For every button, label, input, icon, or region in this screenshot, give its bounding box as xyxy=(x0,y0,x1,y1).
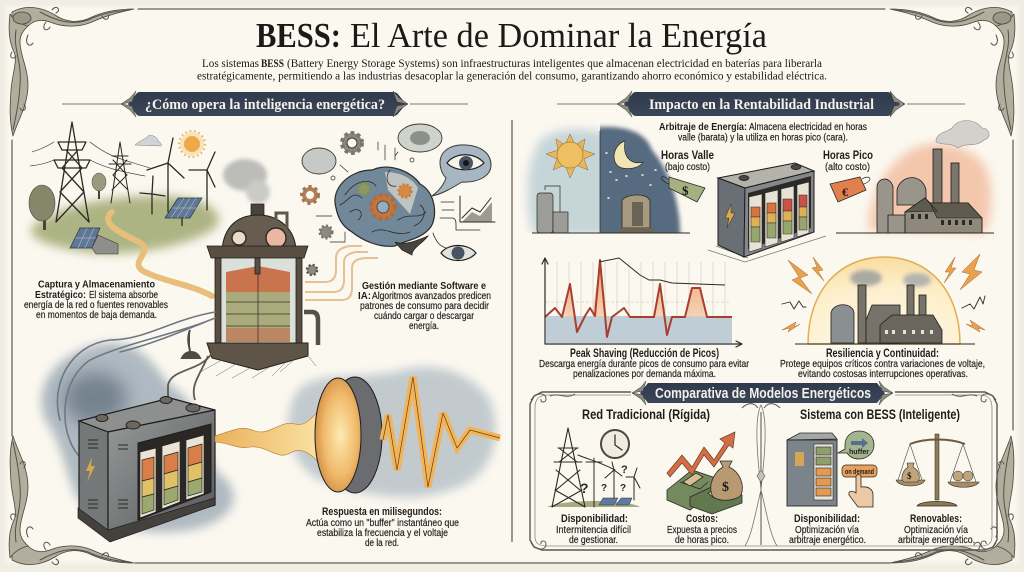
solar panels xyxy=(70,198,202,254)
intro text: Los sistemas xyxy=(202,58,259,70)
text: Captura y Almacenamiento: en momentos de baja demanda. xyxy=(36,310,157,321)
smoke xyxy=(936,120,989,148)
on demand button: on demand xyxy=(845,467,874,476)
ground xyxy=(547,501,640,507)
orange price tag xyxy=(830,177,870,202)
illustration: energy flame to flywheel and waveform xyxy=(215,367,500,497)
outer gears xyxy=(302,133,362,238)
tanks xyxy=(877,178,926,233)
dark wash xyxy=(63,372,127,424)
text: Captura y Almacenamiento: Captura y Almacenamiento xyxy=(38,278,155,290)
icon: traditional grid xyxy=(547,428,640,507)
text: Captura y Almacenamiento: energía de la red o fuentes renovables xyxy=(24,300,168,311)
factory xyxy=(831,285,942,343)
banner: Cómo opera xyxy=(62,91,468,117)
reference line xyxy=(546,301,730,303)
hatch shadow xyxy=(708,236,826,262)
side pipe xyxy=(276,213,287,228)
text: Peak Shaving: penalizaciones por demanda máxima. xyxy=(573,369,716,380)
grid xyxy=(557,262,725,344)
text: Disponibilidad BESS: Disponibilidad: xyxy=(794,513,860,525)
terminals xyxy=(739,164,801,181)
text: Gestión mediante Software e IA: energía. xyxy=(409,321,439,332)
text: Resiliencia y Continuidad: evitando costosas interrupciones operativas. xyxy=(798,369,968,380)
red demand line xyxy=(545,260,732,337)
hill wash xyxy=(31,196,219,254)
hand xyxy=(849,475,873,507)
illustration: valley hours day and night xyxy=(528,127,705,240)
money bag: $ xyxy=(722,480,729,495)
chart: peak shaving xyxy=(542,258,742,347)
text: Arbitraje de Energía xyxy=(659,121,867,144)
vents xyxy=(88,440,128,508)
wash xyxy=(288,367,496,497)
circuit lines xyxy=(316,142,398,242)
banner: Impacto: Impacto en la Rentabilidad Industrial xyxy=(649,97,874,113)
smoke xyxy=(850,270,931,287)
text: Disponibilidad red: de gestionar. xyxy=(569,535,618,546)
voltage squiggles xyxy=(782,296,985,309)
text: Gestión mediante Software e IA: Gestión mediante Software e xyxy=(362,280,486,292)
panel: comparativa frame xyxy=(530,392,997,550)
data wires to brain xyxy=(305,246,378,300)
top xyxy=(718,163,814,188)
text: Arbitraje de Energía: Arbitraje de Energía: xyxy=(659,121,747,133)
server body xyxy=(787,440,837,506)
speech bubble eye xyxy=(432,145,491,196)
night machine xyxy=(619,195,654,233)
dome xyxy=(222,215,296,250)
text: Renovables: arbitraje energético. xyxy=(898,535,975,546)
intro text: estratégicamente, permitiendo a las industrias desacoplar la generación del consumo, garantizando ahorro económico y estabilidad eléctrica. xyxy=(197,70,827,82)
text: Resiliencia y Continuidad: Protege equipos críticos contra variaciones de voltaje, xyxy=(780,359,985,370)
brain folds xyxy=(340,170,426,234)
thought clouds xyxy=(302,124,442,180)
text: Renovables xyxy=(898,513,975,546)
bolt xyxy=(725,204,735,228)
text: Disponibilidad BESS: Optimización vía xyxy=(795,525,860,536)
right pan with coins xyxy=(948,444,979,487)
text: Captura y Almacenamiento: El sistema absorbe xyxy=(89,290,158,301)
illustration: battery reactor xyxy=(200,159,378,378)
corner ornament: top left xyxy=(9,7,134,136)
text: Respuesta en milisegundos: de la red. xyxy=(365,538,399,549)
banner: Cómo opera: ¿Cómo opera la inteligencia energética? xyxy=(145,97,385,113)
text: Peak Shaving xyxy=(539,348,750,380)
text: Arbitraje de Energía: valle (barata) y la utiliza en horas pico (cara). xyxy=(678,132,848,144)
illustration: peak hours factory xyxy=(830,120,994,233)
orange wash xyxy=(868,143,991,233)
battery front xyxy=(108,410,215,537)
opening xyxy=(748,176,811,249)
text: Gestión mediante Software e IA: cuándo cargar o descargar xyxy=(374,311,475,322)
cells xyxy=(814,444,833,500)
growth chart xyxy=(440,196,495,230)
text: Costos: de horas pico. xyxy=(675,535,729,546)
stars xyxy=(606,153,656,198)
roof and windows xyxy=(905,198,982,218)
ground line xyxy=(836,232,994,234)
side xyxy=(718,178,745,257)
plug xyxy=(182,330,200,358)
left pan with bag: $ xyxy=(907,471,912,481)
outlet pipe xyxy=(304,312,318,345)
text: Horas Valle xyxy=(661,150,714,173)
text: Horas Pico: (alto costo) xyxy=(825,162,870,173)
icon: balance scale xyxy=(896,434,979,506)
illustration: grid and renewables landscape xyxy=(29,122,219,296)
heading: Red Tradicional: Red Tradicional (Rígida) xyxy=(582,407,710,422)
base xyxy=(207,343,308,370)
battery stack xyxy=(226,266,290,344)
day wash xyxy=(528,129,610,235)
buffer bubble: huffer xyxy=(849,447,869,456)
corner ornament: bottom right xyxy=(890,436,1015,565)
gauges xyxy=(232,228,286,248)
heading: Sistema con BESS: Sistema con BESS (Inteligente) xyxy=(800,407,960,422)
question marks: ? xyxy=(580,480,589,496)
axes xyxy=(542,258,742,347)
text: Renovables: Optimización vía xyxy=(904,525,969,536)
intro text: BESS xyxy=(261,58,284,70)
cells xyxy=(140,435,204,518)
text: Peak Shaving: Descarga energía durante picos de consumo para evitar xyxy=(539,359,750,370)
chimney xyxy=(251,204,264,218)
text: Captura y Almacenamiento xyxy=(24,278,168,321)
wash xyxy=(41,343,234,532)
cloud xyxy=(135,135,161,146)
text: Respuesta en milisegundos: Actúa como un "buffer" instantáneo que xyxy=(306,518,459,529)
title: El Arte de Dominar la Energía xyxy=(350,16,767,55)
large tower xyxy=(30,122,150,222)
brain gears xyxy=(358,183,412,219)
text: Gestión mediante Software e IA: patrones de consumo para decidir xyxy=(360,301,490,312)
rim xyxy=(328,377,382,493)
text: Horas Pico: Horas Pico xyxy=(823,150,873,162)
dome xyxy=(808,257,960,344)
battery side xyxy=(79,421,108,535)
corner ornament: bottom left xyxy=(9,436,134,565)
front xyxy=(744,171,814,257)
disc xyxy=(315,378,361,492)
ground xyxy=(795,343,975,345)
brain stem xyxy=(395,236,428,255)
beam xyxy=(910,440,965,444)
shaved line xyxy=(599,258,725,285)
battery top xyxy=(79,398,215,432)
base plate xyxy=(78,498,215,542)
cables xyxy=(168,353,212,400)
icon: rising costs xyxy=(667,432,742,514)
text: Gestión mediante Software e IA xyxy=(358,280,491,332)
bolts xyxy=(782,254,985,332)
cells xyxy=(749,182,809,252)
lid and pillars xyxy=(207,246,308,346)
brain highlights xyxy=(385,172,418,214)
banner: Comparativa xyxy=(632,381,893,405)
wind turbines xyxy=(140,138,215,214)
green price tag: $ xyxy=(682,183,689,198)
question marks: ? xyxy=(601,483,607,494)
tower xyxy=(552,428,585,507)
banner: Comparativa: Comparativa de Modelos Energéticos xyxy=(655,386,871,402)
illustration: resilience dome xyxy=(782,254,985,344)
question marks: ? xyxy=(620,483,626,494)
title: BESS: xyxy=(256,16,341,55)
ground line xyxy=(532,232,690,234)
night wash xyxy=(600,124,684,232)
post xyxy=(935,434,939,500)
small gear xyxy=(307,265,317,275)
question marks: ? xyxy=(621,464,628,476)
text: Resiliencia y Continuidad: Resiliencia y Continuidad: xyxy=(826,348,939,360)
intro text xyxy=(197,58,827,82)
base xyxy=(917,502,957,506)
blue consumption fill xyxy=(546,316,732,343)
text: Horas Pico xyxy=(823,150,873,173)
text: Disponibilidad red: Intermitencia difícil xyxy=(556,525,631,536)
pole and wires xyxy=(578,455,615,507)
illustration: central battery xyxy=(708,163,826,262)
text: Disponibilidad BESS: arbitraje energético. xyxy=(789,535,866,546)
text: Gestión mediante Software e IA: Algoritmos avanzados predicen xyxy=(372,291,491,302)
lightning mark xyxy=(86,457,95,482)
waveform xyxy=(383,377,500,487)
divider xyxy=(599,131,601,233)
energy path xyxy=(108,212,212,296)
clock xyxy=(601,430,629,458)
text: Costos xyxy=(667,513,737,546)
text: Gestión mediante Software e IA: IA: xyxy=(358,291,371,302)
text: Captura y Almacenamiento: Estratégico: xyxy=(35,289,86,301)
text: Disponibilidad BESS xyxy=(789,513,866,546)
banner: Impacto xyxy=(557,91,965,117)
building xyxy=(905,198,982,233)
text: Disponibilidad red xyxy=(556,513,631,546)
flame xyxy=(215,400,328,472)
panel divider xyxy=(511,120,513,542)
illustration: AI brain xyxy=(302,124,495,260)
swirling lines xyxy=(57,312,215,455)
moon xyxy=(614,141,643,169)
panels xyxy=(599,498,632,505)
trees xyxy=(29,173,106,230)
tanks xyxy=(537,186,568,233)
text: Respuesta en milisegundos: Respuesta en milisegundos: xyxy=(322,506,442,518)
glass body xyxy=(218,252,300,347)
factory windows xyxy=(885,330,933,334)
opening xyxy=(138,424,211,520)
brain body xyxy=(335,167,435,246)
label on server xyxy=(795,452,804,466)
stacks xyxy=(933,149,959,207)
lower eye xyxy=(433,233,476,260)
turbines xyxy=(605,462,640,500)
text: Respuesta en milisegundos xyxy=(306,506,459,549)
text: Renovables: Renovables: xyxy=(910,513,962,525)
orange peak fills xyxy=(563,261,707,317)
ground hatch xyxy=(200,352,316,378)
text: Costos: Costos: xyxy=(686,513,718,525)
text: Respuesta en milisegundos: estabiliza la frecuencia y el voltaje xyxy=(317,528,448,539)
question marks xyxy=(580,464,628,496)
sun xyxy=(546,134,595,178)
text: Costos: Expuesta a precios xyxy=(667,525,737,536)
text: Arbitraje de Energía: Almacena electricidad en horas xyxy=(749,122,867,133)
money stacks xyxy=(667,470,742,514)
smoke xyxy=(223,159,270,204)
rising arrow xyxy=(667,432,735,477)
intro text: (Battery Energy Storage Systems) son infraestructuras inteligentes que almacenan electricidad en baterías para liberarla xyxy=(287,58,822,70)
corner ornament: top right xyxy=(890,7,1015,136)
orange price tag: € xyxy=(842,185,848,199)
green price tag xyxy=(661,177,705,202)
windows xyxy=(911,214,972,225)
text: Horas Valle: (bajo costo) xyxy=(665,162,710,173)
text: Resiliencia y Continuidad xyxy=(780,348,985,380)
terminals xyxy=(96,396,200,429)
text: Horas Valle: Horas Valle xyxy=(661,150,714,162)
small tower xyxy=(109,142,131,203)
text: Disponibilidad red: Disponibilidad: xyxy=(561,513,628,525)
text: Peak Shaving: Peak Shaving (Reducción de Picos) xyxy=(570,348,719,360)
server top xyxy=(787,433,837,440)
sun xyxy=(179,131,205,157)
icon: BESS server with buffer and on demand xyxy=(787,431,877,507)
illustration: lower battery with storm wash xyxy=(41,312,234,542)
